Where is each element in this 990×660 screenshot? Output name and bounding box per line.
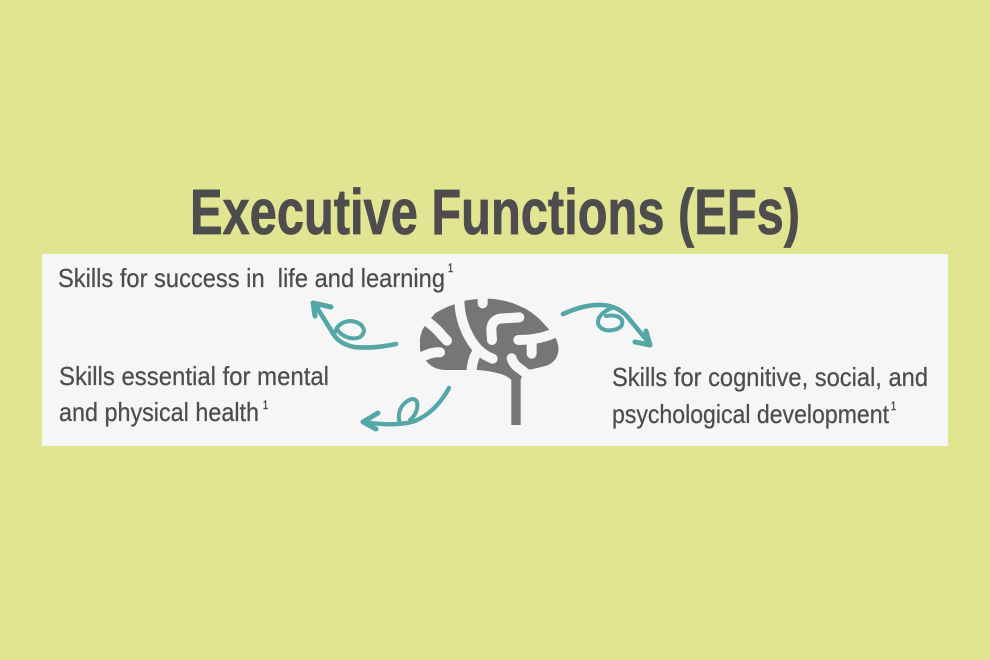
- text: mental and physical health: Skills essential for mental: [59, 361, 329, 391]
- arrow: to lower left text: [363, 388, 449, 429]
- text: mental and physical health: and physical health: [59, 397, 259, 427]
- arrow: to right text: [563, 305, 650, 345]
- title: Executive Functions (EFs): [190, 176, 800, 248]
- text: cognitive, social, psychological development: [612, 362, 928, 429]
- text: success in life and learning: Skills for success in life and learning: [58, 263, 445, 293]
- text: mental and physical health: [59, 361, 329, 427]
- text: success in life and learning: 1: [448, 261, 453, 275]
- text: cognitive, social, psychological development: Skills for cognitive, social, and: [612, 362, 928, 392]
- text: cognitive, social, psychological development: psychological development: [612, 399, 890, 429]
- icon: brain: [418, 295, 560, 425]
- text: cognitive, social, psychological development: 1: [891, 399, 896, 413]
- arrow: to upper left text: [313, 303, 396, 348]
- text: mental and physical health: 1: [263, 398, 268, 412]
- panel: skills: [42, 254, 948, 446]
